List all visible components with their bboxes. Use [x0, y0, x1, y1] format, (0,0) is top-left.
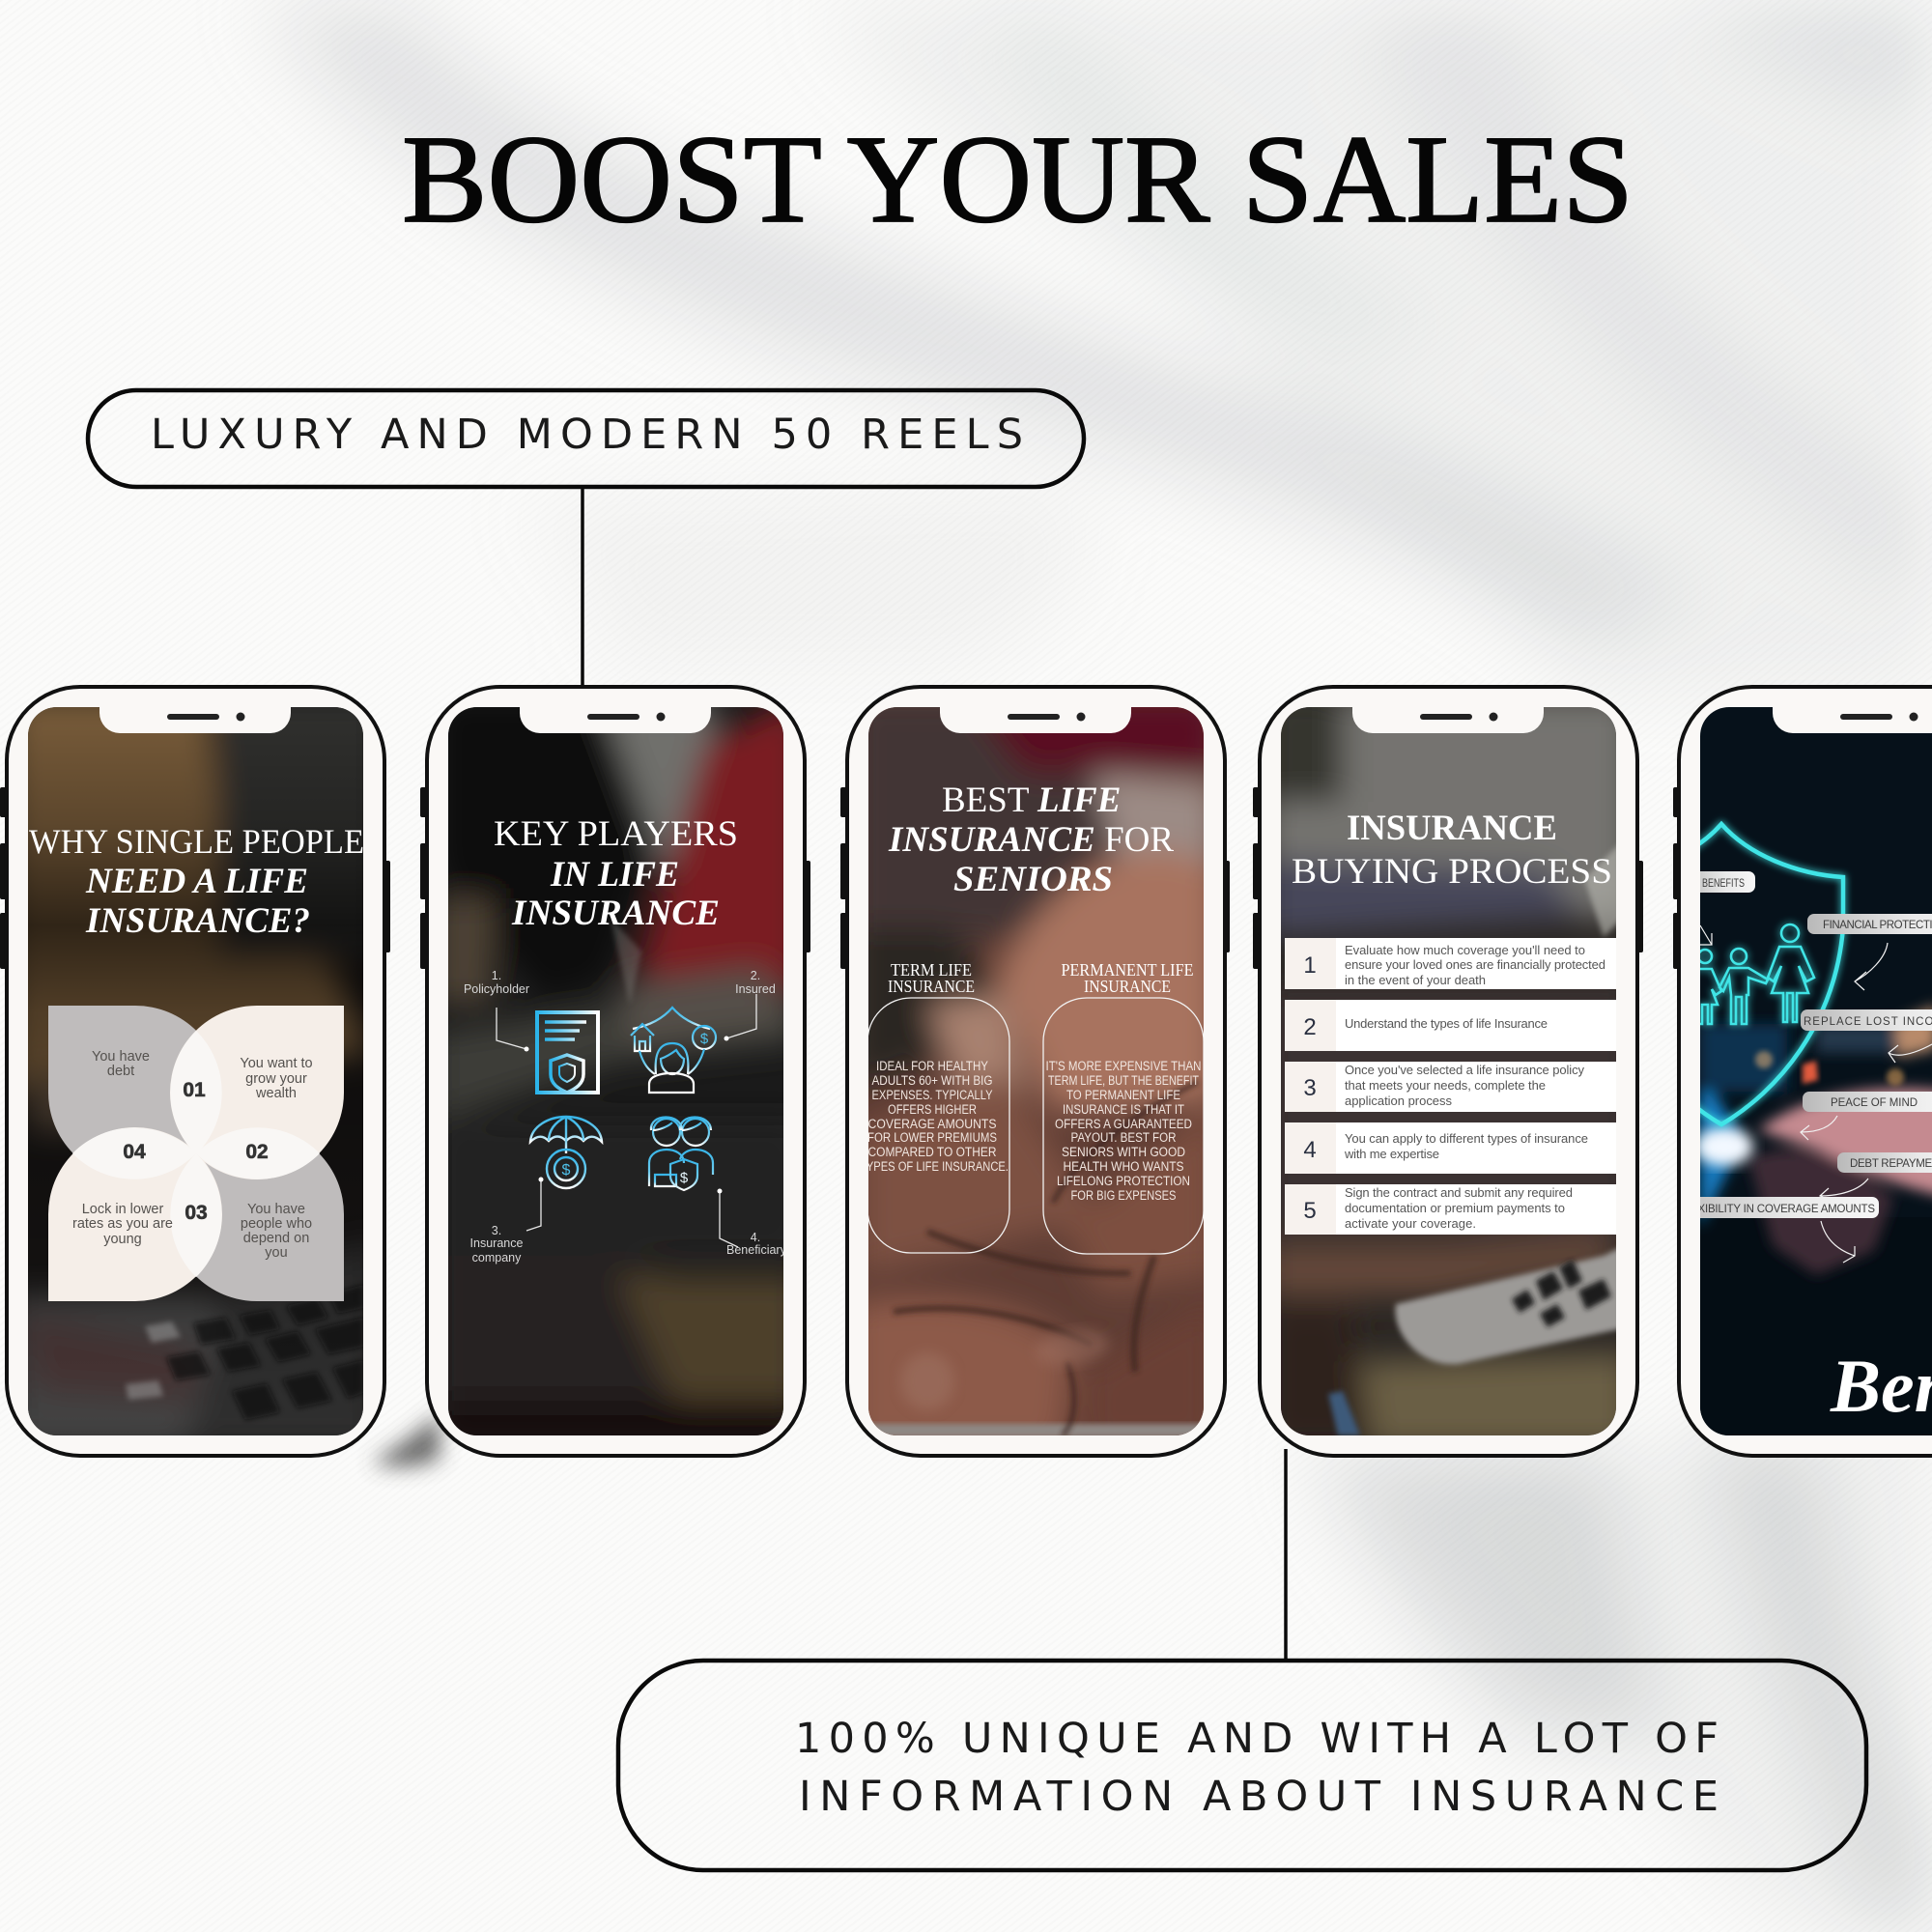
petals diagram: rates as you are [72, 1216, 173, 1232]
panel: permanent life insurance: IT'S MORE EXPENSIVE THAN [1045, 1059, 1202, 1073]
labelled callouts: policyholder, insured, insurance company, beneficiary: Beneficiary [726, 1243, 787, 1257]
title: BOOST YOUR SALES [402, 110, 1634, 249]
heading: why single people need a life insurance [29, 822, 364, 941]
icon: umbrella over coin [530, 1117, 602, 1188]
panel: permanent life insurance: OFFERS A GUARANTEED [1055, 1117, 1192, 1131]
panel: permanent life insurance: HEALTH WHO WANTS [1063, 1159, 1184, 1174]
connector: phone 4 to bottom callout [1284, 1449, 1288, 1662]
panel: permanent life insurance: INSURANCE IS THAT IT [1063, 1102, 1184, 1117]
panel: permanent life insurance: FOR BIG EXPENSES [1070, 1188, 1177, 1203]
petals diagram: 01 [183, 1079, 206, 1101]
step 1 row [1285, 938, 1616, 989]
heading: insurance buying process: BUYING PROCESS [1292, 852, 1612, 892]
benefit pills: FLEXIBILITY IN COVERAGE AMOUNTS [1678, 1204, 1875, 1215]
screen photo: laptop and sweater [28, 707, 363, 1435]
petals diagram: people who [241, 1216, 312, 1232]
step 3 row: that meets your needs, complete the [1345, 1078, 1546, 1093]
screen photo: laptop and hand [1281, 707, 1616, 1435]
step 5 row: 5 [1303, 1198, 1317, 1224]
petals diagram: 02 [245, 1141, 269, 1163]
callout: 100% unique and with a lot of information about insurance: 100% UNIQUE AND WITH A LOT OF [795, 1715, 1719, 1763]
phone 4: insurance buying process [1253, 687, 1643, 1456]
connector: top callout to phone 2 [581, 487, 584, 686]
petals diagram: wealth [255, 1086, 297, 1101]
heading: insurance buying process: INSURANCE [1347, 809, 1557, 848]
callout: 100% unique and with a lot of information about insurance: INFORMATION ABOUT INSURANCE [799, 1773, 1719, 1821]
labelled callouts: policyholder, insured, insurance company, beneficiary: Policyholder [464, 982, 529, 996]
icon: insured person with shield, house and coin [631, 1008, 716, 1093]
petals diagram: 04 [123, 1141, 146, 1163]
phone 2 notch [520, 705, 711, 733]
petals diagram: You have [92, 1049, 150, 1065]
step 2 row [1285, 1000, 1616, 1051]
panel: term life insurance: FOR LOWER PREMIUMS [867, 1130, 997, 1145]
panel: term life insurance: IDEAL FOR HEALTHY [876, 1059, 988, 1073]
petals diagram: debt [107, 1064, 134, 1079]
step 1 row: Evaluate how much coverage you'll need to [1345, 943, 1585, 957]
panel: term life insurance: OFFERS HIGHER [888, 1102, 977, 1117]
panel: permanent life insurance: PERMANENT LIFE [1061, 960, 1194, 980]
benefit pills: PEACE OF MIND [1831, 1097, 1918, 1109]
step 2 row: Understand the types of life Insurance [1345, 1016, 1548, 1031]
benefit pills: BENEFITS [1702, 878, 1745, 890]
labelled callouts: policyholder, insured, insurance company, beneficiary: 2. [751, 969, 760, 982]
heading: key players in life insurance: KEY PLAYERS [494, 814, 738, 854]
shadow under phone 1 [372, 1412, 440, 1466]
panel: term life insurance: INSURANCE [888, 977, 975, 996]
phone 5: benefits [1673, 685, 1932, 1458]
icon: two beneficiaries with shield [649, 1117, 713, 1190]
labelled callouts: policyholder, insured, insurance company, beneficiary [464, 969, 787, 1264]
heading: key players in life insurance: IN LIFE [550, 855, 679, 895]
heading: key players in life insurance: INSURANCE [511, 894, 720, 933]
phone 5 notch [1773, 705, 1932, 733]
petals diagram: You want to [240, 1056, 313, 1071]
heading: best life insurance for seniors: BEST LIFE [942, 781, 1121, 820]
callout: 100% unique and with a lot of information about insurance [618, 1661, 1866, 1870]
panel: term life insurance [860, 960, 1009, 1253]
step 1 row: ensure your loved ones are financially protected [1345, 957, 1605, 972]
phone 1 notch [99, 705, 291, 733]
petals diagram: Lock in lower [82, 1202, 163, 1217]
panel: permanent life insurance: SENIORS WITH GOOD [1062, 1145, 1185, 1159]
petals diagram: depend on [243, 1231, 309, 1246]
step 4 row [1285, 1122, 1616, 1174]
labelled callouts: policyholder, insured, insurance company, beneficiary: 3. [492, 1224, 501, 1237]
step 1 row: 1 [1303, 952, 1317, 979]
step 3 row: application process [1345, 1094, 1453, 1108]
heading: why single people need a life insurance: INSURANCE? [85, 901, 310, 941]
petals diagram: 03 [185, 1202, 208, 1224]
heading: best life insurance for seniors [888, 781, 1174, 899]
screen photo: glowing shield over hand [1700, 707, 1932, 1435]
step 2 row: 2 [1303, 1014, 1317, 1040]
panel: permanent life insurance [1043, 960, 1204, 1254]
heading: insurance buying process [1292, 809, 1612, 892]
step 4 row: 4 [1303, 1137, 1317, 1163]
icon: insured person with shield, house and coin: $ [700, 1031, 709, 1047]
panel: permanent life insurance: LIFELONG PROTECTION [1057, 1174, 1190, 1188]
icon: umbrella over coin: $ [562, 1162, 571, 1179]
heading: key players in life insurance [494, 814, 738, 933]
petals diagram [48, 1006, 344, 1301]
step 3 row: Once you've selected a life insurance policy [1345, 1063, 1584, 1077]
labelled callouts: policyholder, insured, insurance company, beneficiary: Insurance [470, 1236, 523, 1250]
phone 3: best life insurance for seniors [840, 687, 1230, 1456]
step 4 row: You can apply to different types of insurance [1345, 1131, 1588, 1146]
panel: term life insurance: EXPENSES. TYPICALLY [871, 1088, 993, 1102]
panel: term life insurance: COMPARED TO OTHER [867, 1145, 997, 1159]
panel: term life insurance: COVERAGE AMOUNTS [867, 1117, 997, 1131]
step 1 row: in the event of your death [1345, 973, 1486, 987]
arrows [1700, 925, 1932, 1263]
callout: luxury and modern 50 reels: LUXURY AND MODERN 50 REELS [151, 411, 1023, 459]
benefit pills [1700, 871, 1932, 1218]
icon: two beneficiaries with shield: $ [680, 1170, 689, 1186]
petals diagram: grow your [245, 1071, 307, 1087]
labelled callouts: policyholder, insured, insurance company, beneficiary: 4. [751, 1231, 760, 1244]
heading: best life insurance for seniors: SENIORS [953, 860, 1113, 899]
panel: term life insurance: ADULTS 60+ WITH BIG [871, 1073, 993, 1088]
labelled callouts: policyholder, insured, insurance company, beneficiary: company [472, 1251, 522, 1264]
panel: term life insurance: TYPES OF LIFE INSURANCE. [860, 1159, 1009, 1174]
step 5 row: documentation or premium payments to [1345, 1201, 1565, 1215]
petals diagram: you [265, 1245, 288, 1261]
phone 3 notch [940, 705, 1131, 733]
phone 2: key players in life insurance [420, 687, 810, 1456]
step 4 row: with me expertise [1344, 1147, 1439, 1161]
step 5 row: Sign the contract and submit any required [1345, 1185, 1573, 1200]
panel: permanent life insurance: TERM LIFE, BUT THE BENEFIT [1048, 1073, 1199, 1088]
phone 4 notch [1352, 705, 1544, 733]
panel: permanent life insurance: TO PERMANENT LIFE [1066, 1088, 1180, 1102]
labelled callouts: policyholder, insured, insurance company, beneficiary: 1. [492, 969, 501, 982]
panel: permanent life insurance: INSURANCE [1084, 977, 1171, 996]
heading: best life insurance for seniors: INSURANCE FOR [888, 820, 1174, 860]
step 5 row: activate your coverage. [1345, 1216, 1476, 1231]
phone 1: why single people [0, 687, 390, 1456]
screen photo: holding hands [868, 707, 1204, 1435]
icon: policy document with shield [537, 1012, 598, 1093]
step 5 row [1285, 1184, 1616, 1235]
petals diagram: You have [247, 1202, 305, 1217]
step 3 row: 3 [1303, 1075, 1317, 1101]
heading: why single people need a life insurance: NEED A LIFE [85, 862, 308, 901]
heading: why single people need a life insurance: WHY SINGLE PEOPLE [29, 822, 364, 861]
petals diagram: young [103, 1232, 142, 1247]
labelled callouts: policyholder, insured, insurance company, beneficiary: Insured [735, 982, 776, 996]
step 3 row [1285, 1062, 1616, 1112]
panel: permanent life insurance: PAYOUT. BEST FOR [1070, 1130, 1177, 1145]
icon: glowing shield with family [1700, 817, 1852, 1130]
screen photo: handshake over desk [448, 707, 783, 1435]
callout: luxury and modern 50 reels [88, 390, 1084, 487]
panel: term life insurance: TERM LIFE [891, 960, 972, 980]
